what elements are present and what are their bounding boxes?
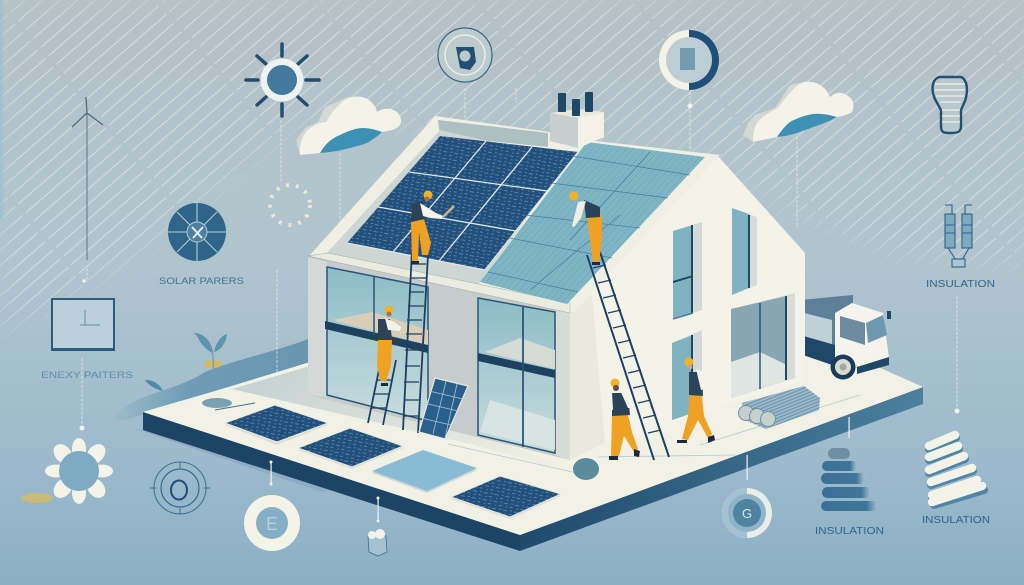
icon: sun xyxy=(246,44,319,116)
icon: E badge xyxy=(244,495,300,551)
roof xyxy=(308,116,720,313)
ladder: corner xyxy=(587,252,669,460)
icon: cloud left xyxy=(296,96,401,155)
eave band xyxy=(308,253,570,313)
plant xyxy=(145,333,227,391)
worker on solar panels xyxy=(411,190,454,264)
leaning solar panel xyxy=(419,378,468,439)
background diagonal stripes xyxy=(0,0,1024,345)
insulation rolls xyxy=(738,386,820,429)
icon: compass disc xyxy=(168,203,226,261)
worker at window xyxy=(377,306,401,386)
icon: filter columns xyxy=(945,205,972,267)
label: insulation top right: INSULATION xyxy=(926,279,995,290)
ladder: front short xyxy=(368,360,396,425)
icon: wind turbine xyxy=(72,97,103,260)
centre window xyxy=(478,298,555,453)
icon: small cube xyxy=(368,529,387,556)
icon: G ring xyxy=(722,488,772,538)
dashed connector lines xyxy=(82,88,957,428)
worker on insulation xyxy=(570,192,602,265)
worker walking xyxy=(677,358,715,443)
label: solar panels: SOLAR PARERS xyxy=(159,276,244,287)
platform xyxy=(130,350,923,551)
floor insulation sheet xyxy=(372,450,477,493)
icon: faint sun xyxy=(270,185,310,225)
patio door xyxy=(731,293,795,398)
icon: flower sun xyxy=(21,438,113,504)
ladder: front tall xyxy=(403,250,428,433)
gable side wall xyxy=(570,155,805,460)
label: insulation right: INSULATION xyxy=(922,515,990,526)
ground swoosh and plant xyxy=(112,333,308,420)
icon: cloud right xyxy=(743,81,853,142)
stone near corner xyxy=(573,458,599,480)
icon: E badge: E xyxy=(266,514,278,534)
teal insulation on roof xyxy=(480,142,705,304)
left window xyxy=(325,267,428,421)
icon: target ring xyxy=(150,462,210,514)
top right window xyxy=(732,208,757,295)
lower side window xyxy=(672,330,702,420)
icon: stacked stones xyxy=(821,448,878,511)
floor solar panel 2 xyxy=(298,428,403,469)
floor solar panel 3 xyxy=(451,476,561,519)
icon: half ring badge xyxy=(659,30,719,90)
roof underlay xyxy=(322,130,570,290)
icon: striped bulb xyxy=(933,77,967,133)
insulation membrane strip xyxy=(438,120,548,147)
chimney xyxy=(550,92,604,148)
small stone on platform xyxy=(202,398,255,410)
upper side window xyxy=(673,222,702,319)
solar array on roof xyxy=(347,136,578,270)
delivery truck xyxy=(800,295,891,380)
icon: top ring xyxy=(438,28,492,82)
front wall xyxy=(308,257,570,460)
worker by ladder xyxy=(607,378,640,460)
label: energy patterns: ENEXY PAITERS xyxy=(41,370,133,381)
connector dots xyxy=(80,104,960,522)
label: insulation centre: INSULATION xyxy=(815,526,884,537)
floor solar panel 1 xyxy=(225,405,328,445)
icon: picture frame xyxy=(51,299,115,351)
icon: G ring: G xyxy=(742,506,752,521)
icon: insulation pillows xyxy=(929,435,984,505)
house xyxy=(308,155,805,460)
